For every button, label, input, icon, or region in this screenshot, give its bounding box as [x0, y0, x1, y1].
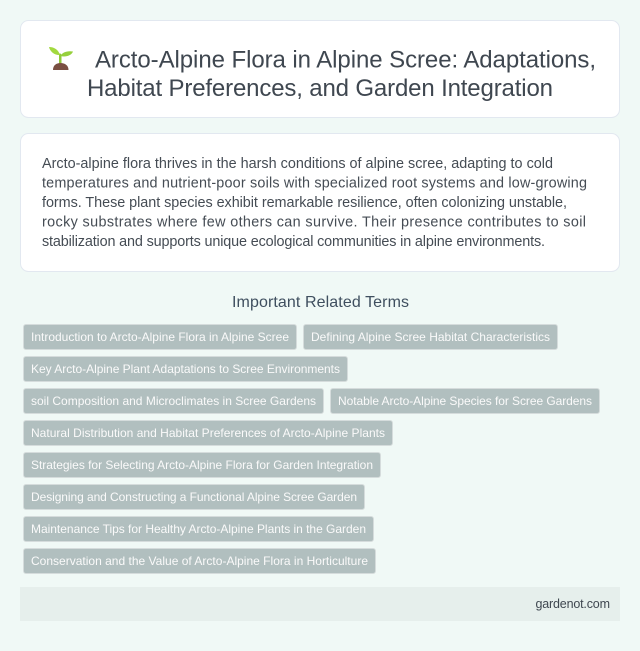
chip 7: [24, 452, 380, 478]
chip 3: [24, 356, 348, 382]
icon: seedling: [49, 47, 73, 70]
text block: description: rocky substrates where few others can survive. Their presence contributes to soil: [42, 214, 586, 230]
chip 8: Designing and Constructing a Functional Alpine Scree Garden: [31, 490, 357, 504]
title: Habitat Preferences, and Garden Integration: [87, 75, 553, 102]
footer text: gardenot.com: [536, 597, 610, 611]
chip 1: [24, 324, 296, 350]
panel: related terms chips: [24, 324, 600, 574]
chip 6: Natural Distribution and Habitat Preferences of Arcto-Alpine Plants: [31, 426, 385, 440]
chip 8: [24, 484, 364, 510]
chip 5: Notable Arcto-Alpine Species for Scree Gardens: [338, 394, 592, 408]
chip 7: Strategies for Selecting Arcto-Alpine Flora for Garden Integration: [31, 458, 373, 472]
title: [87, 46, 596, 102]
chip 9: Maintenance Tips for Healthy Arcto-Alpine Plants in the Garden: [31, 522, 366, 536]
chip 9: [24, 516, 374, 542]
text block: description: temperatures and nutrient-poor soils with specialized root systems and low-growing: [42, 176, 587, 192]
text block: description: Arcto-alpine flora thrives in the harsh conditions of alpine scree, adapting to cold: [42, 156, 553, 172]
chip 6: [24, 420, 392, 446]
title: Arcto-Alpine Flora in Alpine Scree: Adaptations,: [95, 46, 596, 74]
chip 2: Defining Alpine Scree Habitat Characteristics: [311, 330, 550, 344]
chip 10: [24, 548, 376, 574]
chip 5: [330, 388, 600, 414]
footer bar: [20, 587, 620, 621]
text block: description: [42, 156, 587, 250]
chip 2: [304, 324, 558, 350]
chip 1: Introduction to Arcto-Alpine Flora in Alpine Scree: [31, 330, 289, 344]
chip 3: Key Arcto-Alpine Plant Adaptations to Scree Environments: [31, 362, 340, 376]
panel: title card: [20, 20, 620, 118]
chip 10: Conservation and the Value of Arcto-Alpine Flora in Horticulture: [31, 554, 368, 568]
text block: description: forms. These plant species exhibit remarkable resilience, often colonizing unstable,: [42, 195, 567, 211]
heading: important related terms: Important Related Terms: [232, 294, 409, 311]
panel: description: [20, 134, 620, 272]
text block: description: stabilization and supports unique ecological communities in alpine environments.: [42, 234, 545, 250]
chip 4: [24, 388, 324, 414]
chip 4: soil Composition and Microclimates in Scree Gardens: [31, 394, 316, 408]
